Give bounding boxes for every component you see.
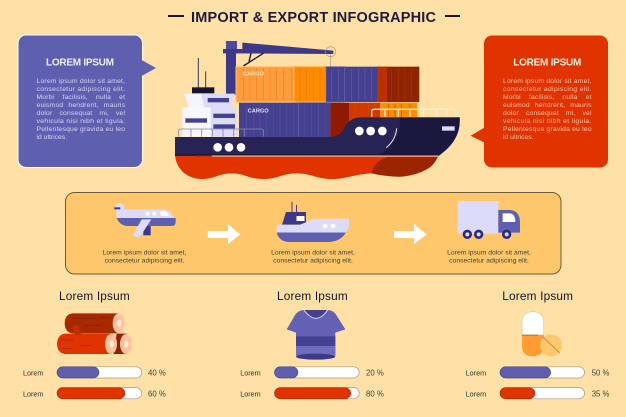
- heading: Lorem Ipsum: [277, 289, 348, 303]
- containers: [236, 67, 419, 138]
- text: airplane caption: Lorem ipsum dolor sit amet,: [103, 250, 187, 256]
- text: truck caption: Lorem ipsum dolor sit amet,: [447, 250, 531, 256]
- bar 20%: Lorem: [240, 369, 261, 378]
- icon: logs: [57, 313, 132, 354]
- panel: left callout: vehicula nisi nibh et ligula.: [36, 118, 125, 125]
- bar 35%: [466, 388, 610, 399]
- panel: left callout: Morbi facilisis, nulla et: [36, 94, 125, 101]
- arrow: [394, 224, 427, 244]
- arrow: [208, 224, 240, 244]
- panel: left callout: Pellentesque gravida eu leo: [36, 126, 125, 133]
- icon: pills: [522, 312, 562, 356]
- panel: right callout: Morbi facilisis, nulla et: [503, 94, 592, 101]
- bar 20%: [240, 367, 384, 378]
- icon: t-shirt: [287, 310, 345, 360]
- bar 80%: Lorem: [240, 390, 261, 398]
- panel: left callout: dolor consequat mi, vel: [36, 110, 125, 117]
- panel: clothing: [240, 289, 384, 399]
- bar 40%: 40 %: [148, 369, 166, 378]
- panel: left callout: [18, 35, 156, 168]
- bar 50%: [466, 367, 610, 378]
- bar 60%: 60 %: [148, 390, 166, 398]
- text: ship caption: consectetur adipiscing elit.: [273, 258, 353, 264]
- bar 80%: 80 %: [366, 390, 384, 398]
- panel: left callout: id ultrices.: [36, 134, 67, 141]
- bar 35%: Lorem: [466, 390, 486, 398]
- bar 60%: [23, 388, 166, 399]
- panel: right callout: [470, 36, 608, 168]
- text: airplane caption: [103, 250, 187, 264]
- heading: Lorem Ipsum: [502, 289, 573, 303]
- hull: [175, 109, 460, 179]
- panel: right callout: id ultrices.: [503, 134, 534, 141]
- text: truck caption: consectetur adipiscing elit.: [449, 258, 529, 264]
- panel: transport flow: [66, 192, 561, 274]
- panel: right callout: Pellentesque gravida eu leo: [503, 126, 592, 133]
- heading: Lorem Ipsum: [59, 289, 130, 303]
- panel: right callout: consectetur adipiscing elit.: [503, 86, 592, 93]
- bar 40%: [23, 367, 166, 378]
- panel: right callout: Lorem ipsum dolor sit amet,: [503, 78, 592, 85]
- text: ship caption: [271, 250, 355, 264]
- panel: right callout: dolor consequat mi, vel: [503, 110, 592, 117]
- icon: truck: [458, 201, 520, 239]
- bar 60%: Lorem: [23, 390, 43, 398]
- icon: airplane: [114, 203, 176, 237]
- panel: right callout: vehicula nisi nibh et ligula.: [503, 118, 592, 125]
- text: ship caption: Lorem ipsum dolor sit amet,: [271, 250, 355, 256]
- panel: left callout: LOREM IPSUM: [46, 58, 114, 68]
- containers: CARGO: [248, 108, 269, 114]
- bar 20%: 20 %: [366, 369, 384, 378]
- panel: medicine: [466, 289, 610, 399]
- bar 50%: 50 %: [592, 369, 610, 378]
- crane: [223, 41, 336, 95]
- bar 50%: Lorem: [466, 369, 486, 378]
- panel: right callout: euismod hendrerit, mauris: [503, 102, 592, 109]
- bar 80%: [240, 388, 384, 399]
- panel: left callout: Lorem ipsum dolor sit amet,: [36, 78, 125, 85]
- bridge: [178, 58, 264, 137]
- text: airplane caption: consectetur adipiscing elit.: [105, 258, 184, 264]
- bar 35%: 35 %: [592, 390, 610, 398]
- illustration: cargo ship: [175, 41, 460, 179]
- panel: wood: [23, 289, 166, 399]
- panel: right callout: LOREM IPSUM: [513, 58, 581, 69]
- panel: left callout: euismod hendrerit, mauris: [36, 102, 126, 109]
- bar 40%: Lorem: [23, 369, 43, 378]
- icon: small ship: [277, 202, 349, 242]
- title: IMPORT & EXPORT INFOGRAPHIC: [191, 10, 437, 26]
- panel: left callout: consectetur adipiscing elit.: [36, 86, 125, 93]
- text: truck caption: [447, 250, 531, 264]
- containers: CARGO: [243, 72, 265, 78]
